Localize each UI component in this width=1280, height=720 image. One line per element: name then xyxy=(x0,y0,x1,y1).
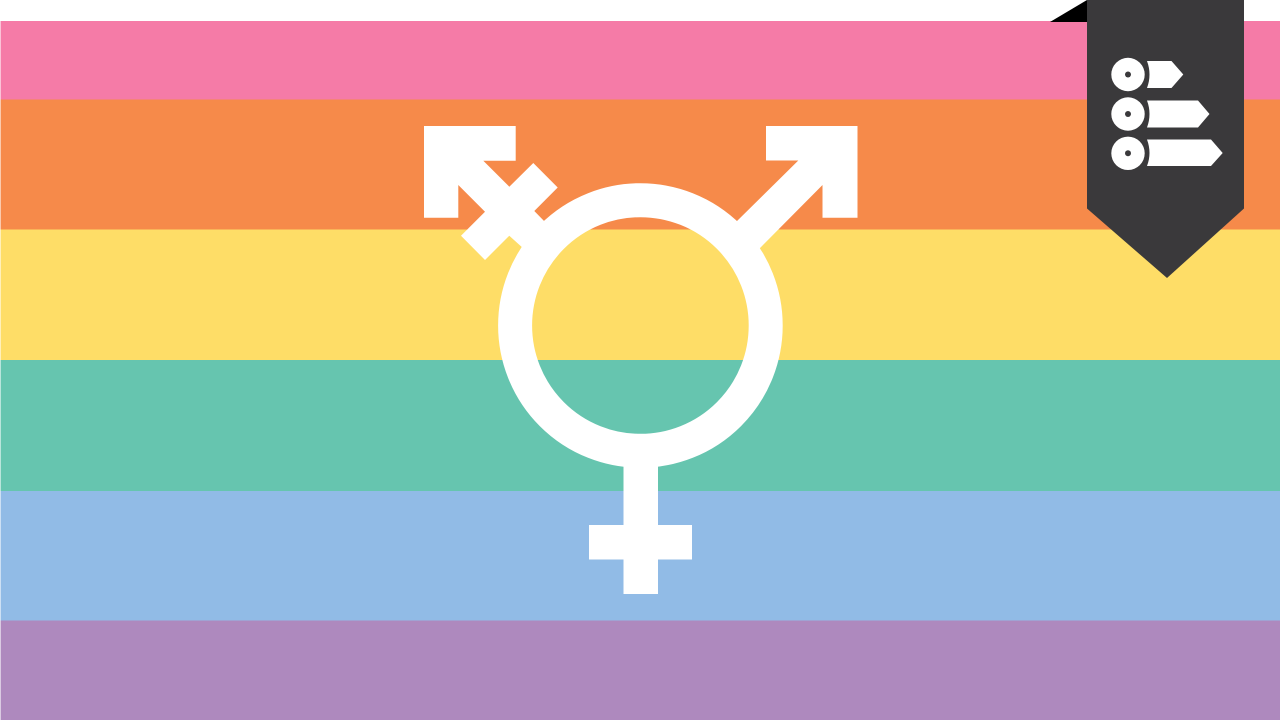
ribbon body xyxy=(1087,0,1244,278)
ring xyxy=(515,200,766,451)
left arrow with crossbar xyxy=(424,126,558,260)
ribbon fold xyxy=(1050,0,1087,22)
icon: transgender symbol xyxy=(424,126,858,594)
bottom cross xyxy=(589,460,692,594)
row 1 xyxy=(1111,58,1183,91)
bookmark badge xyxy=(1050,0,1244,278)
row 2 xyxy=(1111,97,1210,131)
row 3 xyxy=(1111,137,1223,170)
icon: list with arrows xyxy=(1111,58,1223,170)
right arrow xyxy=(736,126,858,250)
